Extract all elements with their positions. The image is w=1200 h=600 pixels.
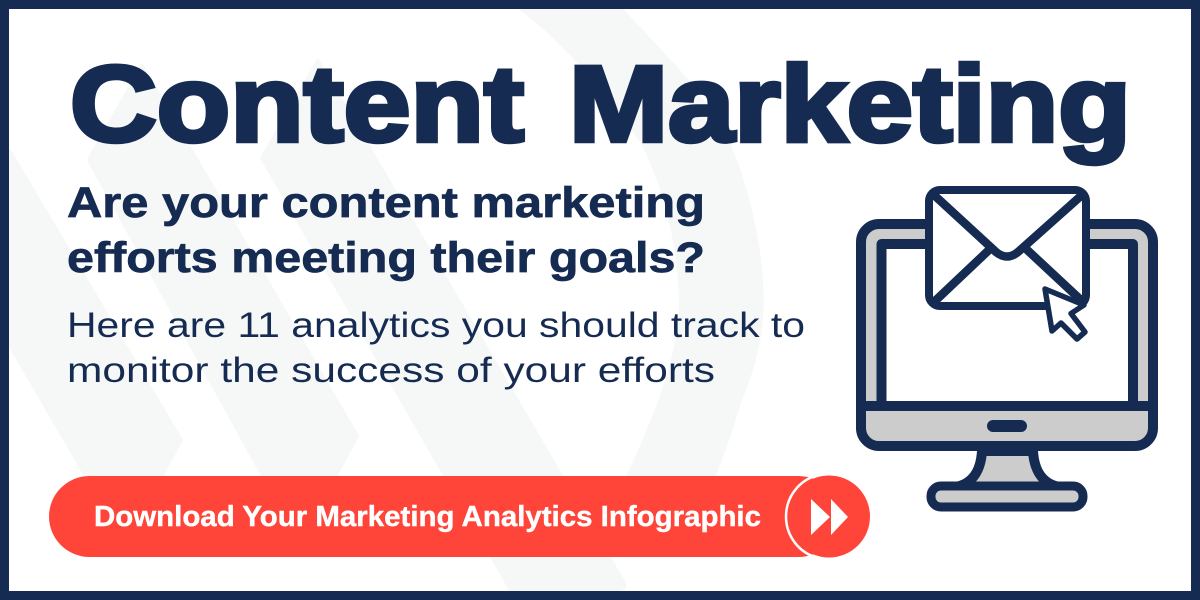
button label: Download Your Marketing Analytics Infographic <box>94 501 761 533</box>
monitor screen <box>882 244 1133 406</box>
heading: question: efforts meeting their goals? <box>67 234 705 282</box>
cursor <box>1045 289 1085 339</box>
heading: question: Are your content marketing <box>67 179 705 227</box>
power button <box>992 425 1022 427</box>
title: Content <box>70 43 524 164</box>
icon: monitor with envelope and cursor <box>861 190 1153 507</box>
button: download <box>49 476 870 558</box>
text block: subheading: monitor the success of your efforts <box>67 351 715 390</box>
envelope <box>929 190 1086 306</box>
text block: subheading <box>67 306 805 390</box>
icon: double arrow circle <box>786 476 870 558</box>
monitor stand <box>931 451 1083 507</box>
heading: question <box>67 179 705 282</box>
title: Marketing <box>569 43 1131 164</box>
monitor body <box>861 224 1153 446</box>
monitor bezel bar <box>861 401 1153 411</box>
title <box>70 43 1131 164</box>
text block: subheading: Here are 11 analytics you should track to <box>67 306 805 345</box>
